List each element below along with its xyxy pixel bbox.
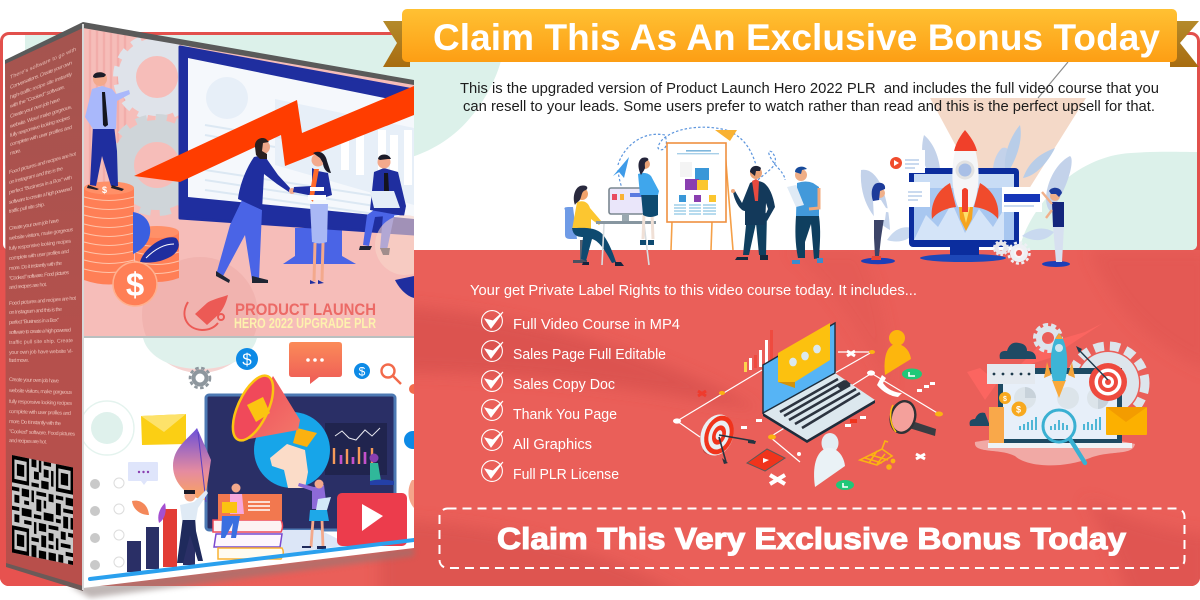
man right (1042, 188, 1070, 267)
rocket (1044, 333, 1075, 398)
man with bars (177, 490, 208, 563)
magnifier (1043, 410, 1085, 463)
call to action button: Claim This Very Exclusive Bonus Today (497, 521, 1127, 556)
woman left (861, 183, 897, 264)
flipchart with puzzle (667, 143, 733, 250)
lower tint circle (142, 257, 258, 373)
chat bubble small (128, 462, 158, 485)
side text block 1: complete with user profiles and (10, 125, 72, 148)
man with clipboard (787, 167, 823, 264)
side text block 1: website. Wow! make gorgeous, (9, 104, 72, 130)
item: sales page (482, 341, 666, 363)
intro paragraph: can resell to your leads. Some users prefer to watch rather than read and this is the perfect upsell for that. (463, 99, 1155, 115)
pale ground blob (975, 437, 1135, 465)
clouds (970, 343, 1036, 426)
subheading: Your get Private Label Rights to this video course today. It includes... (470, 282, 917, 299)
item: thank you page (482, 400, 617, 423)
item: full video course (482, 311, 680, 333)
illustration: analytics dashboard (967, 323, 1147, 465)
target with arrows (695, 410, 756, 464)
QR code (12, 455, 73, 565)
dots grid (90, 478, 124, 570)
coins: $ (1016, 404, 1021, 414)
pink stripes (90, 30, 125, 205)
envelope (141, 414, 186, 445)
dollar coin (113, 262, 157, 306)
phone icon (877, 375, 902, 397)
seated woman at desk (564, 185, 624, 266)
background peach cone (930, 98, 1086, 187)
chat box (987, 364, 1035, 384)
magnifier icon (382, 364, 401, 384)
item: full plr license: Full PLR License (513, 466, 619, 483)
side text block 3: fully responsive looking recipes (9, 239, 71, 252)
cross marks (698, 351, 925, 484)
right edge icons (404, 384, 422, 508)
title banner (402, 9, 1177, 62)
network nodes (673, 350, 943, 456)
paper planes (613, 130, 737, 178)
pale red arrow (967, 323, 1103, 400)
shopping cart (860, 441, 895, 469)
side text block 3: "Cooked" software. Food pictures (9, 270, 69, 282)
side text block 4: your own job have website Vi- (9, 349, 73, 356)
side text block 4 (9, 296, 77, 364)
intro paragraph (460, 81, 1159, 115)
video tile (747, 449, 785, 471)
decorative leaves (861, 125, 1072, 242)
box top edge (5, 22, 414, 85)
dollar coin: $ (126, 266, 144, 303)
handshake man (216, 138, 295, 283)
side text block 2: on Instagram and this is the (9, 166, 63, 186)
floor line (90, 540, 414, 579)
illustration: rocket launch (861, 125, 1072, 267)
man on coins (85, 72, 130, 191)
background mint shape left (25, 35, 504, 160)
speech bubble (289, 342, 342, 384)
side text block 4: traffic pull site ship. Create (9, 338, 73, 346)
side text block 3: website visitors, make gorgeous (9, 227, 73, 242)
megaphone with fist (225, 370, 330, 488)
seated man (359, 154, 406, 255)
ribbon right tail (1170, 21, 1199, 67)
floating blue card (1002, 187, 1042, 212)
side text block 3 (9, 218, 73, 291)
chat bubble (778, 323, 830, 388)
side text block 1: There's software to go with (10, 47, 76, 81)
network lines (677, 352, 939, 462)
panel: red lower section (0, 250, 1200, 600)
woman (293, 152, 332, 284)
big gear (1071, 346, 1145, 420)
side text block 1: high-traffic recipe site instantly (10, 71, 72, 101)
gears (994, 241, 1030, 264)
target decoration (80, 401, 134, 455)
standing woman (638, 157, 659, 245)
lower mint circle (143, 338, 257, 369)
side text block 4: software to create a high powered (9, 328, 71, 336)
box right face (80, 20, 435, 597)
floating text card (890, 182, 930, 207)
side text block 5: complete with user profiles and (9, 409, 71, 417)
side text block 1: Create your own job have (10, 97, 60, 120)
coins: $ (1003, 396, 1007, 403)
box bottom edge (6, 563, 83, 591)
dollar icons: $ (242, 350, 252, 369)
desk with monitor (596, 188, 656, 265)
side text block 5 (9, 377, 75, 446)
item: all graphics (482, 430, 592, 453)
item: sales page: Sales Page Full Editable (513, 346, 666, 363)
dashed flight paths (618, 127, 785, 205)
side text block 1: Conversations. Create your own (10, 60, 72, 91)
monitor (909, 168, 1019, 262)
lower peach dial (375, 215, 414, 275)
decorative leaf (173, 428, 211, 502)
side text block 5: and recipes are hot. (9, 438, 47, 446)
checklist (482, 311, 680, 483)
side text block 4: Food pictures and recipes are hot (9, 296, 77, 307)
orange stack (989, 407, 1004, 443)
product box (5, 20, 435, 597)
product logo: HERO 2022 UPGRADE PLR (234, 315, 376, 332)
side text block 3: more. Do it instantly with the (9, 261, 62, 272)
side text block 5: website visitors, make gorgeous (9, 388, 72, 396)
side text block 1: fully responsive looking recipes (10, 115, 70, 139)
small dashes (741, 382, 935, 429)
floating video card (888, 150, 925, 173)
item: sales copy: Sales Copy Doc (513, 376, 615, 393)
dollar icons (236, 348, 370, 379)
backdrop gears (110, 37, 204, 212)
side text block 5: "Cooked" software. Food pictures (9, 429, 75, 438)
background mint shape right (1019, 152, 1197, 250)
side text block 5: more. Do it instantly with the (9, 419, 61, 427)
box left face (5, 25, 83, 590)
bar chart (127, 509, 195, 572)
woman with tablet (298, 480, 331, 549)
side text block 4: perfect "Business in a Box" (9, 317, 59, 326)
side text block 2: traffic pull site ship. (9, 202, 45, 215)
laptop (988, 368, 1132, 448)
side text block 3: complete with user profiles and (9, 249, 69, 262)
title: Claim This As An Exclusive Bonus Today (433, 17, 1160, 58)
coins (999, 392, 1026, 416)
item: all graphics: All Graphics (513, 436, 592, 453)
target (1076, 346, 1127, 401)
man in suit (731, 166, 775, 260)
item: full plr license (482, 461, 619, 483)
magnifier (887, 398, 936, 436)
side text block 2: perfect "Business in a Box" with (9, 175, 72, 196)
intro paragraph: This is the upgraded version of Product Launch Hero 2022 PLR and includes the full video course that you (460, 81, 1159, 97)
coin stacks (84, 182, 179, 284)
item: sales copy (482, 371, 615, 393)
side text block 2 (9, 151, 76, 215)
side text block 3: and recipes are hot. (9, 282, 47, 291)
logo text: PRODUCT LAUNCH (235, 301, 376, 319)
illustration: digital marketing laptop (673, 323, 943, 490)
ribbon left tail (383, 21, 410, 67)
mini bar chart (744, 330, 773, 372)
play button (337, 493, 407, 546)
monitor (180, 47, 414, 264)
side text block 2: Food pictures and recipes are hot (9, 151, 76, 176)
side text block 3: Create your own job have (9, 218, 59, 232)
item: full video course: Full Video Course in MP4 (513, 316, 680, 333)
person at laptop (370, 454, 394, 485)
rocket (932, 130, 998, 231)
small leaves (132, 501, 166, 523)
books (213, 494, 283, 559)
side text block 1 (9, 47, 76, 157)
yellow person (884, 330, 922, 380)
small leaf (395, 276, 414, 298)
illustration: team presentation (564, 127, 823, 266)
side text block 4: fast move. (9, 358, 29, 364)
side text block 1: more. (10, 148, 21, 157)
dollar icons: $ (359, 364, 366, 378)
orange growth arrow (134, 86, 414, 182)
product box shadow (70, 548, 414, 598)
white person (814, 433, 854, 490)
item: thank you page: Thank You Page (513, 406, 617, 423)
envelope (1106, 407, 1147, 435)
side text block 5: fully responsive looking recipes (9, 399, 72, 407)
gear icon (190, 368, 210, 388)
person on books (221, 484, 244, 538)
call to action button (440, 508, 1184, 568)
product logo (184, 295, 376, 332)
side text block 1: with the "Cooked" software. (9, 84, 65, 110)
blue leaves (133, 212, 179, 263)
laptop (763, 323, 875, 443)
side text block 5: Create your own job have (9, 377, 59, 385)
side text block 2: software to create a high powered (9, 186, 72, 206)
small gear (1035, 325, 1061, 351)
coin stacks: $ (102, 185, 107, 195)
chart monitor (206, 395, 395, 560)
grey thin line (1038, 62, 1068, 98)
side text block 4: on Instagram and this is the (9, 307, 62, 316)
